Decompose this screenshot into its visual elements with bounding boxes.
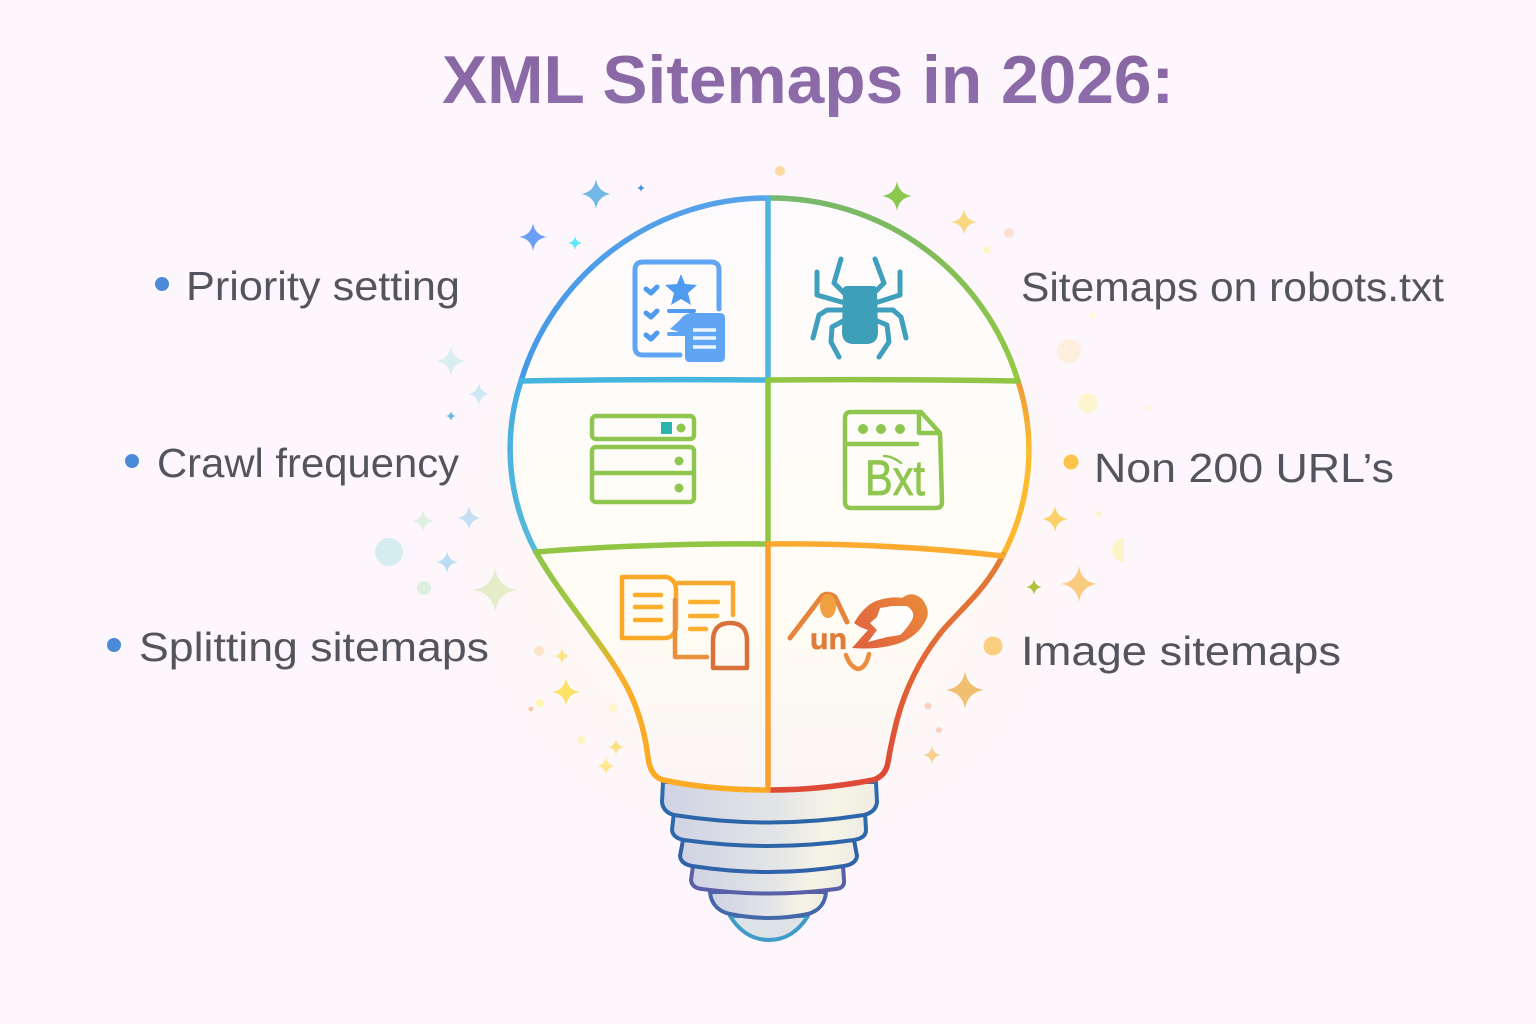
right label: Non 200 URL's: Non 200 URL’s xyxy=(1094,445,1394,491)
base band 3 xyxy=(680,840,857,872)
icon: image house and rocket flame: un xyxy=(810,623,847,656)
soft glow behind bulb xyxy=(418,140,1118,860)
base band 5 xyxy=(710,892,826,918)
left label: Crawl frequency: Crawl frequency xyxy=(157,440,460,486)
base band 2 xyxy=(672,812,866,846)
base tip xyxy=(730,916,808,940)
icon: image house and rocket flame xyxy=(790,594,928,669)
bulb outline segments and dividers xyxy=(510,198,1029,790)
right label: Image sitemaps: Image sitemaps xyxy=(1021,628,1341,674)
icon: robots.txt file xyxy=(845,412,942,508)
icon: server racks xyxy=(592,416,694,502)
base band 1 xyxy=(662,782,877,822)
icon: checklist with star and document xyxy=(635,262,725,362)
icon: robots.txt file: Bxt xyxy=(865,450,925,506)
bulb screw base xyxy=(662,782,877,940)
base band 4 xyxy=(691,866,844,894)
left label: Priority setting: Priority setting xyxy=(186,263,460,309)
title: XML Sitemaps in 2026: xyxy=(442,42,1174,118)
icon: spider crawler xyxy=(813,259,906,357)
right label: Sitemaps on robots.txt: Sitemaps on robots.txt xyxy=(1021,264,1445,310)
sparkles and dots around the bulb xyxy=(375,166,1150,775)
icon: split documents xyxy=(622,577,747,668)
left label: Splitting sitemaps: Splitting sitemaps xyxy=(139,624,489,670)
bulb glass fill xyxy=(510,198,1029,790)
